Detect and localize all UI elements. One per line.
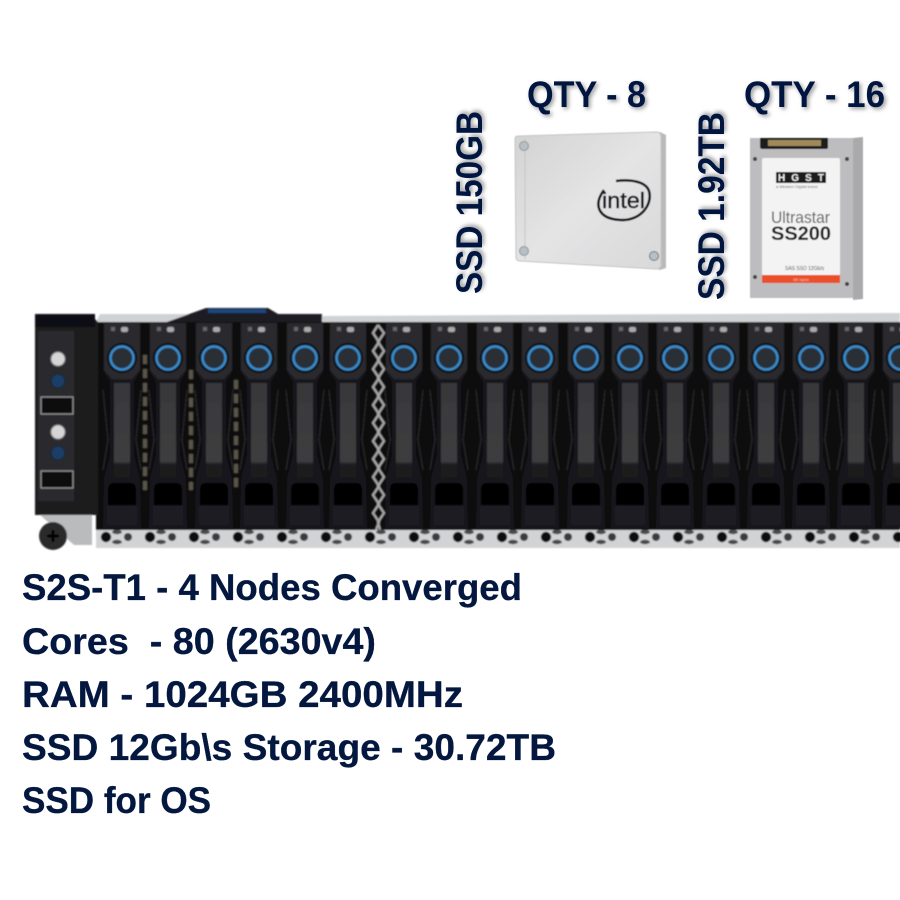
chassis body [96,322,900,532]
label: SSD 1.92TB: SSD 1.92TB [691,112,732,300]
spec: storage: SSD 12Gb\s Storage - 30.72TB [22,727,556,768]
mesh divider [373,325,384,530]
drive bays [103,323,900,528]
title: QTY 8: QTY - 8 [527,74,646,115]
bottom grille [96,530,900,548]
spec: model: S2S-T1 - 4 Nodes Converged [22,567,522,608]
icon: Ultrastar SSD: SAS SSD 12Gb/s [785,266,825,272]
left control ear [35,314,98,550]
icon: Ultrastar SSD: a Western Digital brand [776,184,818,189]
icon: Intel SSD: intel [602,188,645,213]
top blue latch [167,308,322,322]
icon: Ultrastar SSD: SS200 [771,224,831,245]
icon: Ultrastar SSD: HGST [778,173,824,184]
icon: Intel SSD [515,132,666,270]
spec text block [22,567,556,821]
title: QTY 16: QTY - 16 [744,74,885,115]
brass vents [145,355,236,495]
icon: Ultrastar SSD [750,137,863,300]
label: SSD 150GB: SSD 150GB [449,111,490,294]
spec: OS drive: SSD for OS [22,780,211,821]
icon: Ultrastar SSD: SK hynix [793,277,809,282]
icon: Ultrastar SSD: Ultrastar [771,208,830,227]
spec: RAM: RAM - 1024GB 2400MHz [22,674,463,715]
spec: cores: Cores - 80 (2630v4) [22,621,376,662]
server chassis [35,308,900,550]
top silver rim [96,313,900,322]
